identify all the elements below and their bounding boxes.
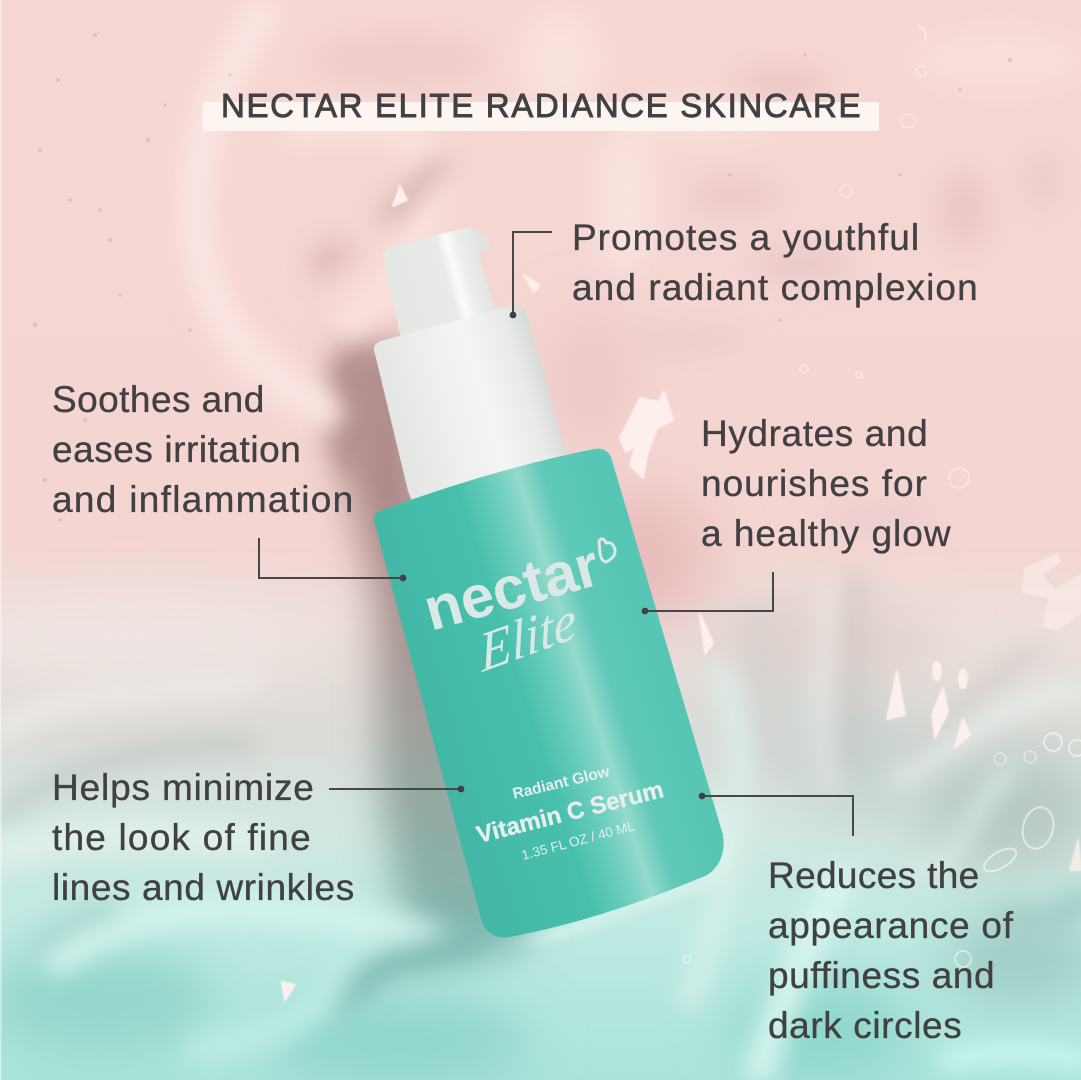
collar (374, 305, 570, 520)
pump head (383, 227, 510, 370)
benefit: fine lines: the look of fine (52, 817, 312, 858)
benefit: hydrates: a healthy glow (701, 513, 952, 554)
mid left bands (0, 680, 250, 730)
benefit: puffiness: puffiness and (768, 955, 995, 996)
label text (474, 763, 666, 863)
body (374, 449, 724, 937)
bubbles (683, 25, 1081, 967)
benefit: fine lines: lines and wrinkles (52, 867, 355, 908)
benefit: soothes irritation: eases irritation (52, 429, 301, 470)
nectar wordmark: nectar (417, 531, 606, 644)
title text: NECTAR ELITE RADIANCE SKINCARE (221, 87, 862, 124)
benefit: puffiness: Reduces the (768, 855, 980, 896)
benefit: hydrates: Hydrates and (701, 413, 928, 454)
specks (33, 33, 1012, 522)
benefit: youthful complexion (572, 217, 979, 308)
benefit: soothes irritation: and inflammation (52, 479, 355, 520)
benefit: fine lines (52, 767, 355, 908)
benefit: youthful complexion: and radiant complexion (572, 267, 979, 308)
benefit: puffiness: appearance of (768, 905, 1014, 946)
benefit: fine lines: Helps minimize (52, 767, 315, 808)
benefit: soothes irritation: Soothes and (52, 379, 265, 420)
benefit: soothes irritation (52, 379, 355, 520)
highlights: splashes of white gel (282, 186, 1081, 1000)
Radiant Glow: Radiant Glow (511, 763, 612, 803)
ear swirl (196, 15, 325, 412)
volume: 1.35 FL OZ / 40 ML (520, 818, 637, 863)
Vitamin C Serum: Vitamin C Serum (474, 776, 666, 849)
vertical streaks right (850, 580, 855, 760)
benefit: puffiness (768, 855, 1014, 1046)
benefit: youthful complexion: Promotes a youthful (572, 217, 920, 258)
heart icon (599, 539, 615, 562)
left edge light line (0, 0, 2, 1080)
shadow beside bottle (340, 340, 530, 970)
benefit: hydrates (701, 413, 952, 554)
title band with heading (203, 102, 879, 131)
brand logo (417, 531, 615, 684)
Elite script: Elite (476, 588, 579, 684)
gel halo around bottle base (520, 770, 735, 945)
benefit: hydrates: nourishes for (701, 463, 928, 504)
benefit: puffiness: dark circles (768, 1005, 962, 1046)
